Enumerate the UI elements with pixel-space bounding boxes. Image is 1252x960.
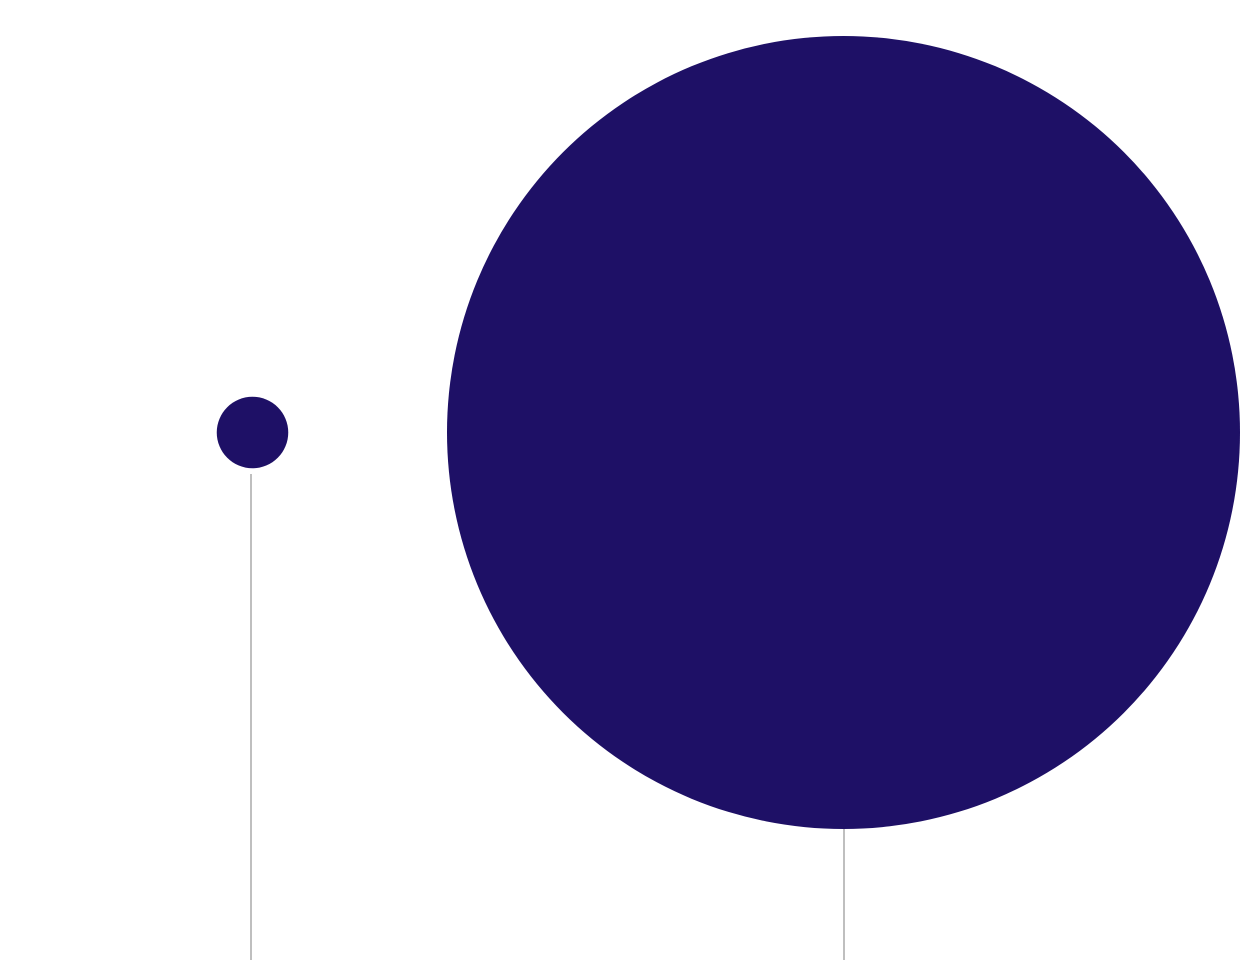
small circle with leader line xyxy=(217,397,288,960)
large circle with leader line xyxy=(447,36,1240,960)
